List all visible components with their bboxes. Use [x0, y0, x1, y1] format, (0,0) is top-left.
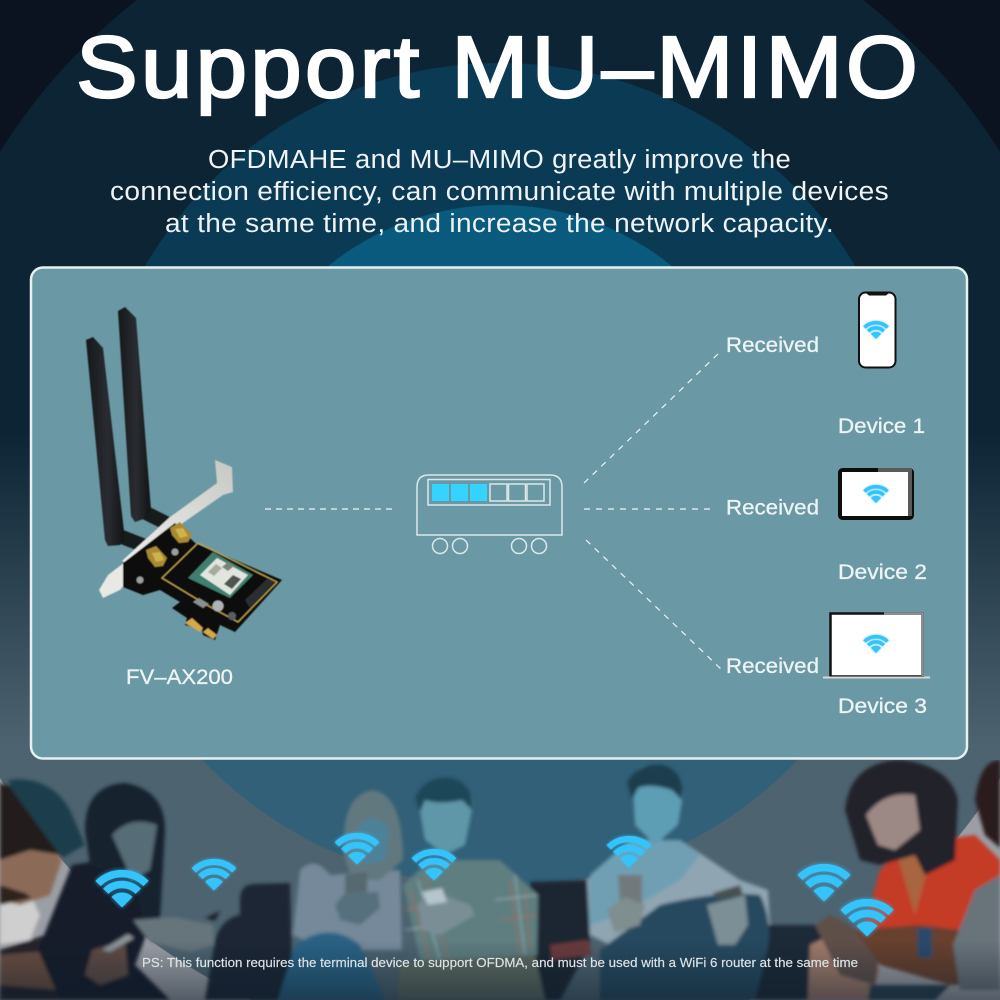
sofa — [205, 880, 825, 1000]
product: wifi card with antennas — [86, 307, 282, 640]
icon: router — [417, 475, 562, 554]
subtitle text: at the same time, and increase the network capacity. — [165, 210, 834, 238]
footnote: PS: This function requires the terminal device to support OFDMA, and must be used with a WiFi 6 router at the same time — [142, 956, 858, 970]
labels: received: Received — [726, 334, 819, 357]
antenna: rear — [118, 307, 151, 522]
person: man plaid shirt — [398, 778, 545, 1000]
labels: received — [726, 334, 819, 678]
bracket lower — [99, 562, 137, 598]
sma connectors — [146, 546, 167, 567]
subtitle text — [110, 146, 889, 238]
labels: devices — [838, 415, 927, 718]
person: blonde woman — [278, 790, 403, 1000]
title: Support MU–MIMO — [76, 19, 921, 116]
bottom shade — [0, 940, 1000, 1000]
person: man at left — [0, 779, 170, 1000]
icon: laptop — [823, 614, 930, 678]
labels: devices: Device 1 — [838, 415, 925, 438]
labels: devices: Device 3 — [838, 695, 927, 718]
labels: devices: Device 2 — [838, 561, 927, 584]
arrow: card to router dashed line — [265, 508, 397, 510]
subtitle text: connection efficiency, can communicate with multiple devices — [110, 178, 889, 206]
labels: received: Received — [726, 496, 819, 520]
gold fingers — [185, 618, 203, 632]
person: woman red dress — [808, 760, 1000, 1000]
bracket upper — [122, 460, 233, 563]
icons: wifi signals over people — [98, 836, 891, 936]
panel: network diagram — [31, 268, 967, 758]
photo: people on sofa — [0, 760, 1000, 1000]
m.2 slot — [245, 578, 275, 608]
module — [188, 552, 253, 598]
person: woman dark top — [38, 783, 220, 1000]
person: man white shirt — [550, 765, 770, 1000]
antenna hinge lines — [122, 513, 170, 548]
arrows: router to devices dashed lines — [584, 352, 722, 670]
product label: FV–AX200 — [126, 666, 233, 689]
capacitor — [212, 600, 224, 612]
subtitle text: OFDMAHE and MU–MIMO greatly improve the — [208, 146, 791, 174]
icon: phone — [859, 292, 896, 368]
gold outline — [162, 543, 277, 622]
antenna: front — [86, 337, 125, 546]
labels: received: Received — [726, 655, 819, 678]
pcb — [123, 523, 282, 640]
icon: tablet — [840, 470, 912, 518]
